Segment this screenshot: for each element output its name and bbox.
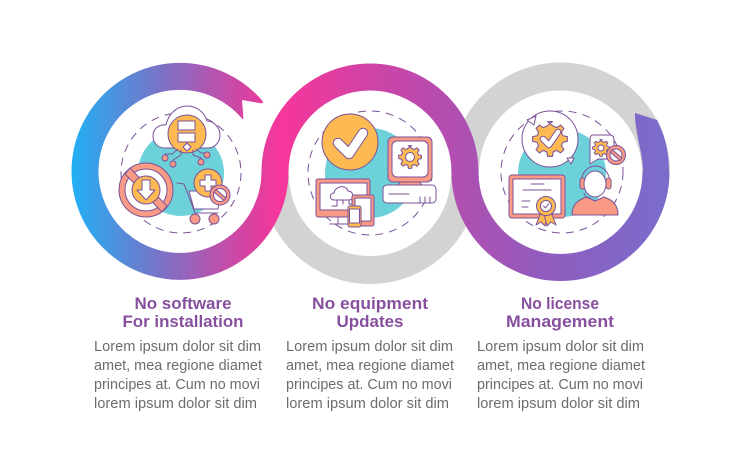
panel 2: icon group: [308, 111, 436, 235]
icon: cloud server: [153, 106, 220, 167]
text block: no license: [477, 295, 646, 412]
text block: no equipment: principes at. Cum no movi: [286, 376, 452, 393]
text block: no equipment: lorem ipsum dolor sit dim: [286, 395, 449, 412]
text block: no license: Management: [506, 313, 615, 331]
icon: cycle gear check: [522, 111, 578, 167]
icon: settings monitor: [383, 137, 436, 203]
icon: check badge: [322, 114, 378, 170]
text block: no software: lorem ipsum dolor sit dim: [94, 395, 257, 412]
text block: no equipment: Updates: [336, 313, 404, 331]
text block: no license: amet, mea regione diamet: [477, 357, 646, 374]
text block: no software: [94, 295, 263, 412]
text block: no equipment: Lorem ipsum dolor sit dim: [286, 338, 453, 355]
grey ribbon: lower arc of circle 2: [275, 175, 465, 270]
text block: no software: Lorem ipsum dolor sit dim: [94, 338, 261, 355]
text block: no equipment: amet, mea regione diamet: [286, 357, 455, 374]
text block: no equipment: [286, 295, 455, 412]
icon: cloud devices: [316, 179, 374, 227]
text block: no software: amet, mea regione diamet: [94, 357, 263, 374]
text block: no license: principes at. Cum no movi: [477, 376, 643, 393]
text block: no software: principes at. Cum no movi: [94, 376, 260, 393]
icon: shopping cart: [177, 169, 230, 224]
text block: no software: No software: [134, 295, 232, 313]
text block: no license: No license: [521, 295, 599, 313]
icon: speech bubble gear: [590, 135, 626, 164]
icon: support agent: [572, 166, 618, 215]
text block: no equipment: No equipment: [312, 295, 429, 313]
icon: certificate: [509, 175, 565, 226]
panel 1: icon group: [119, 106, 241, 233]
grey ribbon: upper arc of circle 3: [465, 76, 656, 172]
gradient ribbon with arrow tail: [85, 76, 669, 268]
icon: no download: [119, 163, 173, 217]
panel 3: icon group: [501, 111, 626, 233]
text block: no software: For installation: [122, 313, 244, 331]
text block: no license: lorem ipsum dolor sit dim: [477, 395, 640, 412]
text block: no license: Lorem ipsum dolor sit dim: [477, 338, 644, 355]
